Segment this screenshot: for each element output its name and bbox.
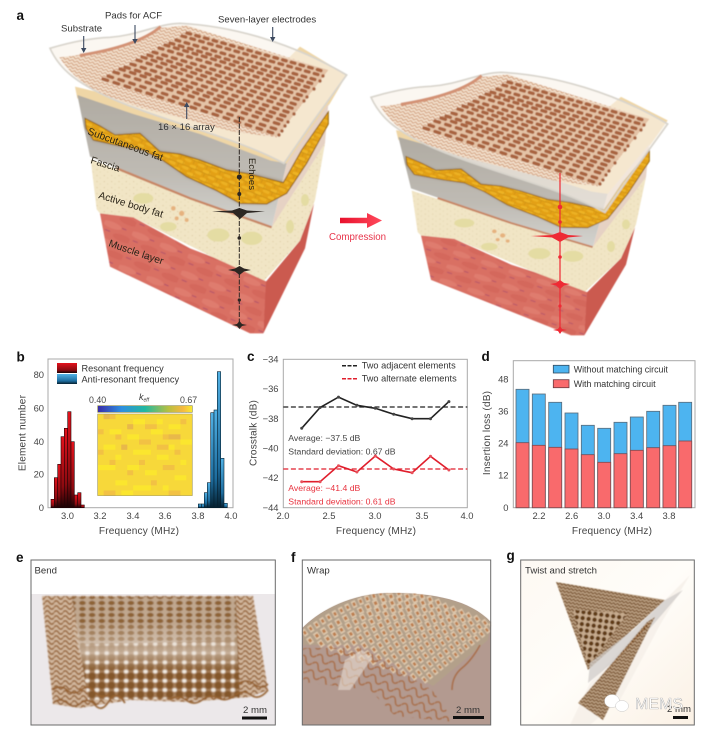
label: 16 x 16 array: 16 × 16 array <box>158 122 215 133</box>
axis labels: 48 <box>498 374 508 384</box>
label: active body fat: Active body fat <box>97 190 164 220</box>
axis labels: −44 <box>263 502 278 513</box>
panel letter f: f <box>291 550 296 565</box>
axis labels: 3.5 <box>415 510 429 521</box>
photo background <box>31 560 275 725</box>
colour bar: 0.40 <box>89 395 106 405</box>
axis labels: 2.6 <box>565 510 578 521</box>
axis labels: 24 <box>498 438 508 448</box>
panel d: insertion loss bars <box>482 349 695 537</box>
wrapped dome array <box>303 588 496 722</box>
axis labels: −40 <box>263 442 278 454</box>
red statistics: Average: −41.4 dB <box>288 483 361 493</box>
legend <box>553 364 668 389</box>
axis labels: 12 <box>498 470 508 480</box>
watermark: MEMS: MEMS <box>635 696 683 713</box>
label: twist and stretch: Twist and stretch <box>525 566 597 576</box>
legend: Two alternate elements <box>362 374 457 384</box>
panel letter a: a <box>16 8 24 23</box>
axis labels: 36 <box>498 406 508 416</box>
label: bend: Bend <box>34 566 57 576</box>
black statistics: Standard deviation: 0.67 dB <box>288 446 396 456</box>
axis labels: Insertion loss (dB) <box>482 391 493 475</box>
red bars: with matching circuit <box>516 441 692 508</box>
axis labels: 2.2 <box>532 510 546 521</box>
axis labels: 0 <box>503 502 508 513</box>
left tissue block with electrode patch <box>50 23 347 333</box>
label: subcutaneous fat: Subcutaneous fat <box>86 126 164 164</box>
panel b: histogram with heatmap <box>16 350 238 537</box>
twisted mesh <box>556 575 690 725</box>
scale bar: 2 mm <box>243 705 267 716</box>
axis labels: −36 <box>263 383 278 394</box>
legend: Resonant frequency <box>82 364 164 374</box>
colour bar: 0.67 <box>180 395 197 405</box>
label: pads for ACF: Pads for ACF <box>105 10 162 22</box>
axis labels: 3.4 <box>126 510 140 521</box>
axis labels: 4.0 <box>224 510 238 521</box>
label: seven-layer electrodes <box>218 14 316 42</box>
scale bar <box>453 705 484 719</box>
label: substrate: Substrate <box>61 24 102 34</box>
axis labels: 3.0 <box>597 510 611 521</box>
red statistics <box>288 483 396 506</box>
mesh sheet <box>42 596 268 708</box>
axis labels: Crosstalk (dB) <box>248 400 260 466</box>
axis labels: 3.4 <box>630 510 643 521</box>
resonant frequency histogram <box>51 412 84 508</box>
panel letter g: g <box>506 548 515 563</box>
axis labels: 2.0 <box>276 510 290 521</box>
axis labels: 3.0 <box>368 510 382 521</box>
axis labels: Frequency (MHz) <box>572 526 652 537</box>
panel letter c: c <box>247 349 255 364</box>
axis labels: −34 <box>263 354 278 364</box>
panel letter b: b <box>16 350 25 364</box>
colour bar: eff <box>144 398 150 404</box>
black statistics: Average: −37.5 dB <box>288 433 361 443</box>
blue bars: without matching circuit <box>516 389 692 508</box>
legend: Without matching circuit <box>574 364 668 374</box>
legend <box>57 363 179 384</box>
label: pads for ACF <box>105 10 162 44</box>
axis labels: 4.0 <box>460 510 474 521</box>
legend: Two adjacent elements <box>362 360 456 370</box>
axis labels: 3.2 <box>93 510 107 521</box>
axis labels: Element number <box>18 394 28 471</box>
heatmap <box>98 414 192 496</box>
red echo line <box>531 173 583 334</box>
axis labels: 3.8 <box>191 510 205 521</box>
label: substrate <box>61 24 102 53</box>
panel g: twist and stretch photo <box>506 548 694 725</box>
axis labels: 20 <box>34 468 44 480</box>
panel f: wrap photo <box>291 550 496 725</box>
axis labels: −42 <box>263 472 278 483</box>
label: 16 x 16 array <box>158 102 215 133</box>
axis labels <box>18 369 238 537</box>
axis labels: Frequency (MHz) <box>336 526 416 537</box>
label: compression: Compression <box>329 232 386 243</box>
axis labels: 80 <box>34 369 44 380</box>
label: fascia: Fascia <box>89 155 121 175</box>
panel letter d: d <box>482 349 490 364</box>
right compressed tissue block <box>371 72 668 335</box>
axis labels: 2.5 <box>322 510 336 521</box>
compression arrow <box>340 213 382 228</box>
axis labels: 0 <box>39 502 44 513</box>
legend: Anti-resonant frequency <box>82 374 179 384</box>
panel a: tissue schematic <box>16 8 668 335</box>
photo background <box>302 560 491 725</box>
alternate elements series <box>300 454 450 483</box>
scale bar: 2 mm <box>456 705 480 716</box>
panel c: crosstalk line chart <box>247 349 474 537</box>
black statistics <box>288 433 396 456</box>
label: seven-layer electrodes: Seven-layer electrodes <box>218 14 316 26</box>
photo background <box>521 560 694 725</box>
label: wrap: Wrap <box>307 566 330 576</box>
legend: With matching circuit <box>574 379 656 389</box>
anti-resonant frequency histogram <box>198 372 227 508</box>
axis labels: 3.8 <box>662 510 676 521</box>
axis labels <box>248 354 474 537</box>
axis labels: 3.6 <box>158 510 172 521</box>
label: echoes: Echoes <box>246 158 257 190</box>
panel letter e: e <box>16 550 24 565</box>
colour bar: k <box>139 392 144 402</box>
colour bar <box>89 392 197 412</box>
adjacent elements series <box>300 396 450 430</box>
axis labels: Frequency (MHz) <box>99 526 179 537</box>
black echo line <box>212 117 265 329</box>
panel e: bend photo <box>16 550 275 725</box>
axis labels <box>482 374 676 537</box>
legend <box>342 360 457 384</box>
label: muscle layer: Muscle layer <box>107 238 165 268</box>
axis labels: 40 <box>34 436 44 447</box>
scale bar: 2 mm <box>667 704 691 715</box>
red statistics: Standard deviation: 0.61 dB <box>288 496 396 506</box>
axis labels: −38 <box>263 413 278 424</box>
axis labels: 3.0 <box>61 510 74 521</box>
watermark: MEMS <box>604 694 683 713</box>
average lines <box>283 407 467 469</box>
axis labels: 60 <box>34 402 44 414</box>
